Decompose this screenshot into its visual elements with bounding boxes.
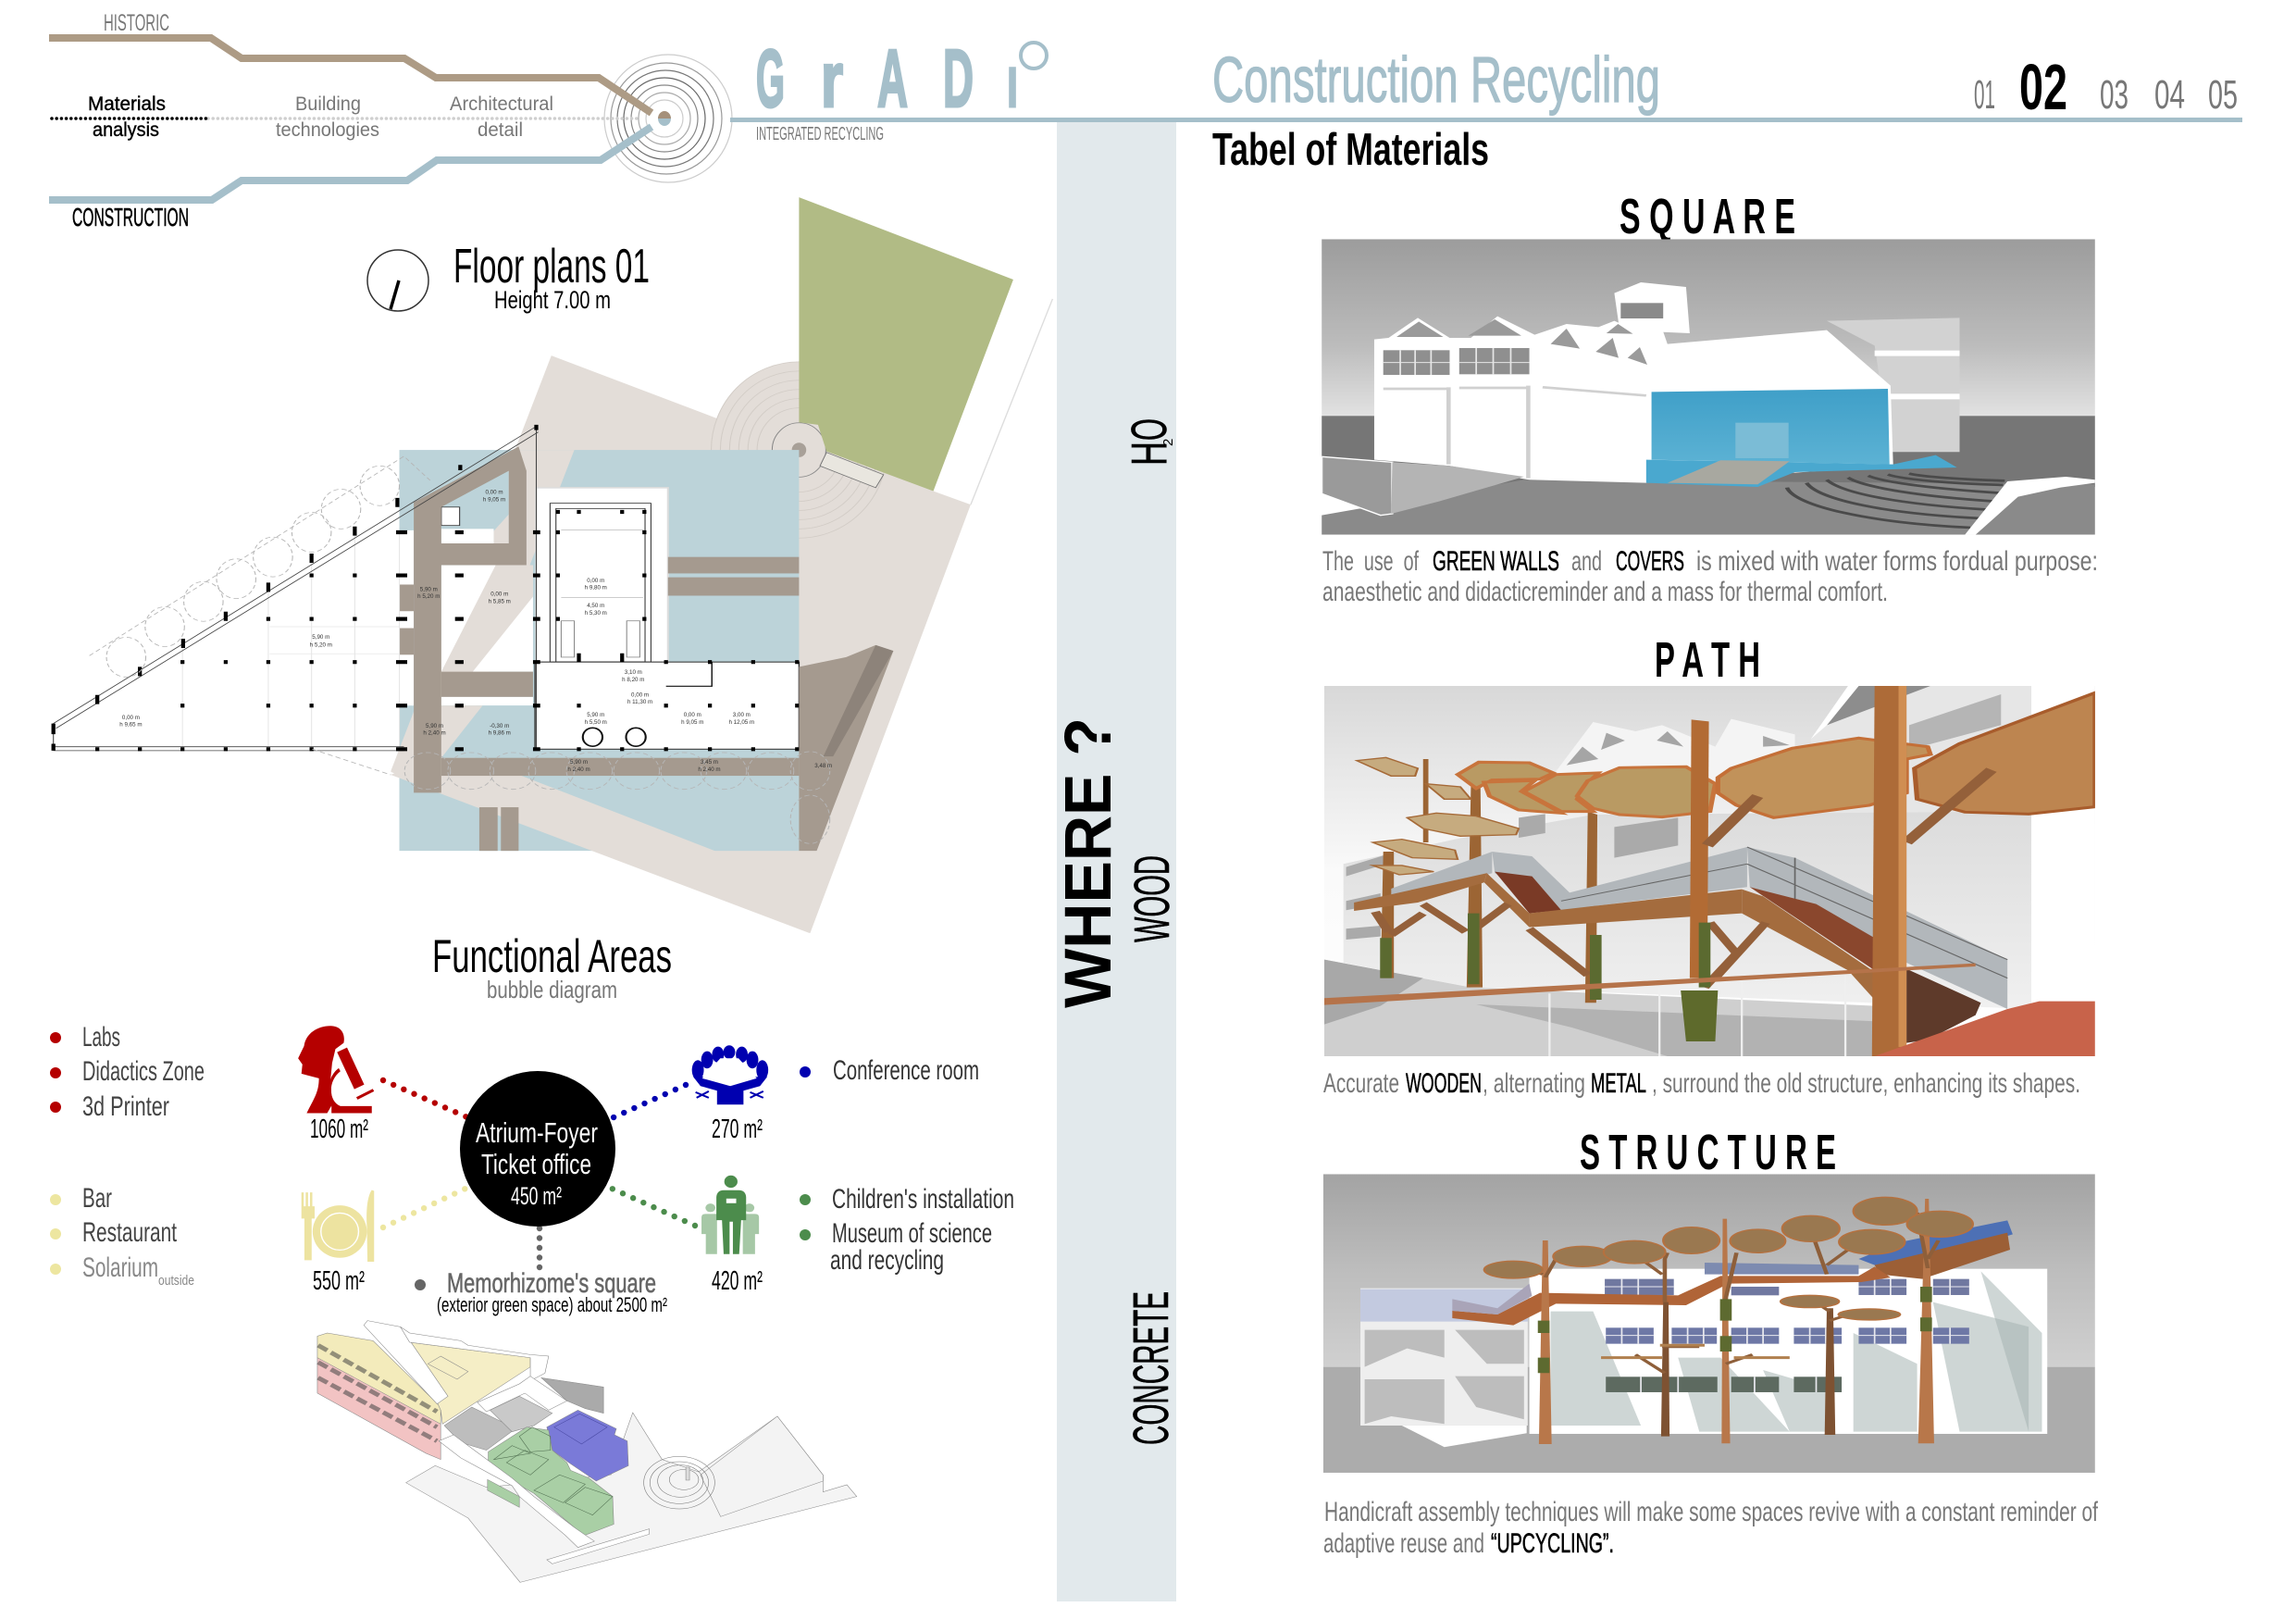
main canopies	[1458, 762, 1715, 817]
logo: GrADi: r	[821, 36, 843, 123]
caption: square	[1322, 546, 2098, 607]
route labels: Materials	[88, 93, 166, 115]
glass annex bands	[1875, 354, 1960, 396]
red deck	[1875, 1002, 2095, 1056]
north arrow	[367, 250, 428, 311]
boardwalk strip	[824, 645, 893, 756]
vine post	[1386, 914, 1705, 1000]
white roof edge	[1811, 686, 1858, 739]
blue inner rim	[554, 1414, 607, 1444]
gable shadows	[1567, 731, 1790, 766]
memorhizome's square label: Memorhizome's square	[447, 1268, 656, 1299]
level labels: h 8,20 m	[622, 677, 644, 683]
level labels: h 2,40 m	[698, 766, 721, 773]
atrium inner frame	[550, 504, 651, 662]
label: wood: WOOD	[1124, 855, 1180, 942]
roof gables	[1556, 719, 1795, 796]
level labels: h 9,05 m	[483, 497, 505, 504]
caption: square: is mixed with water forms fordual purpose:	[1696, 546, 2098, 577]
side strip: where	[1052, 122, 1180, 1601]
caption: square: and	[1571, 546, 1602, 577]
level labels: 0,00 m	[631, 691, 649, 698]
level labels: 0,00 m	[587, 578, 604, 584]
label: concrete: CONCRETE	[1123, 1291, 1179, 1445]
render: square	[1322, 239, 2095, 535]
hall white side	[400, 530, 414, 705]
floor plans heading: Height 7.00 m	[494, 286, 611, 314]
axonometric functional diagram	[317, 1321, 857, 1582]
level labels: h 9,86 m	[489, 730, 511, 737]
hatched block	[541, 1377, 603, 1414]
left stairs	[1391, 462, 1524, 514]
upper bridge deck	[1875, 1233, 2010, 1279]
glass balustrade	[1549, 975, 1845, 1056]
level labels: h 5,85 m	[489, 598, 511, 604]
wall shadows	[1551, 1271, 2042, 1432]
level labels: h 2,40 m	[567, 766, 590, 773]
railing panels	[1391, 847, 2007, 1009]
level labels: 0,00 m	[122, 715, 140, 721]
roof void	[428, 1356, 468, 1379]
caption: path	[1323, 1068, 2080, 1099]
level labels: h 2,40 m	[423, 730, 446, 737]
windows upper	[1605, 1279, 1969, 1295]
area labels: 270 m²	[712, 1115, 763, 1144]
window mullions	[1605, 1279, 1969, 1392]
green museum block	[489, 1427, 614, 1535]
level labels: h 9,80 m	[585, 585, 607, 592]
amphitheatre steps	[1787, 474, 2004, 528]
water basin	[400, 450, 799, 851]
blue conference block	[547, 1410, 628, 1481]
windows lower	[1606, 1377, 1842, 1392]
white building	[1530, 1269, 2047, 1434]
tower window	[1620, 303, 1663, 318]
route line: historic	[49, 38, 652, 113]
route labels: detail	[478, 119, 523, 141]
yellow roof slab	[410, 1342, 530, 1424]
circular stepped plaza	[712, 362, 887, 538]
level labels: h 12,05 m	[728, 719, 754, 726]
caption: path: Accurate	[1323, 1068, 1399, 1099]
legend: conference (blue)	[800, 1055, 979, 1086]
heading: functional areas	[432, 930, 672, 1003]
central bubble: atrium: Ticket office	[481, 1148, 591, 1180]
blue upper bridge	[1858, 1220, 2013, 1265]
dotted progress line	[52, 117, 640, 120]
stair treads front	[1750, 887, 1875, 970]
label: H2O: O	[1122, 418, 1177, 441]
left wing scenes	[1365, 1330, 1524, 1424]
area labels: 1060 m²	[310, 1115, 368, 1144]
legend: food (yellow)	[50, 1183, 194, 1289]
legend: labs (red): 3d Printer	[82, 1091, 169, 1122]
dark roof	[1827, 686, 1930, 725]
brown walkways	[400, 446, 893, 851]
gray atrium	[444, 1407, 515, 1451]
long wall	[1344, 812, 2031, 1009]
giant post	[1872, 686, 1906, 1056]
back posts	[1381, 759, 1597, 1003]
area labels	[310, 1115, 763, 1296]
walkway	[1452, 1266, 1891, 1326]
level labels: h 9,05 m	[681, 719, 703, 726]
page numbers: 04	[2154, 72, 2185, 118]
page numbers	[1974, 51, 2238, 123]
windows mid	[1606, 1327, 1969, 1344]
heading: where?: WHERE ?	[1052, 717, 1125, 1008]
page numbers: 05	[2208, 72, 2238, 118]
atrium circles	[583, 662, 712, 746]
level labels: h 9,65 m	[119, 722, 143, 729]
site slope	[701, 1416, 823, 1516]
gray stairs	[490, 1396, 552, 1432]
structural columns	[97, 510, 797, 751]
low platforms	[1601, 1345, 1790, 1358]
logo: GrADi: ı	[1007, 41, 1018, 122]
plaza stair	[820, 453, 884, 488]
diagonal columns	[54, 425, 536, 751]
caption: path: , surround the old structure, enhancing its shapes.	[1652, 1068, 2080, 1099]
legend: food (yellow): Restaurant	[82, 1217, 177, 1248]
beige strip over water: bottom	[391, 748, 810, 933]
caption: path: METAL	[1591, 1068, 1646, 1099]
sky	[1323, 1174, 2095, 1367]
legend: labs (red)	[50, 1022, 205, 1122]
roof gables	[1396, 319, 1647, 365]
heading: path: P A T H	[1655, 632, 1760, 688]
branches	[1524, 1213, 1939, 1373]
left stair rail	[1452, 1284, 1532, 1314]
legend: museum (green): and recycling	[830, 1245, 944, 1276]
stair treads lower	[1906, 969, 1980, 1043]
caption: square: GREEN WALLS	[1433, 546, 1559, 577]
route labels: HISTORIC	[104, 10, 169, 36]
level labels: 5,90 m	[312, 634, 329, 641]
wing white slab	[535, 662, 799, 749]
legend: food (yellow): outside	[158, 1273, 194, 1289]
floor plans heading	[367, 240, 650, 314]
atrium white slab	[536, 488, 668, 662]
hall grid	[182, 530, 400, 749]
render: structure	[1323, 1174, 2095, 1473]
site base	[406, 1413, 857, 1582]
page numbers: 03	[2100, 72, 2128, 118]
level labels: h 5,20 m	[417, 593, 440, 600]
level labels: 0,00 m	[485, 490, 503, 496]
legend: conference (blue): Conference room	[833, 1055, 979, 1086]
floor shadow near	[1476, 1004, 1875, 1056]
white L walkway	[478, 1377, 567, 1412]
pool	[1646, 455, 1957, 487]
central bubble: atrium: Atrium-Foyer	[476, 1116, 598, 1149]
header rule	[730, 118, 2242, 122]
green lawn	[799, 197, 1013, 492]
ground	[1323, 1367, 2095, 1473]
caption: square: COVERS	[1616, 546, 1684, 577]
concrete bridge	[1668, 460, 1790, 484]
site: thin boundary	[971, 299, 1052, 505]
legend: museum (green)	[800, 1184, 1014, 1276]
level labels: h 5,20 m	[310, 642, 332, 648]
label: H2O: H	[1122, 442, 1177, 466]
white walkway	[439, 1435, 594, 1548]
level labels: 3,45 m	[701, 759, 718, 766]
foreground handrail	[1324, 964, 1976, 1005]
level labels: 3,48 m	[814, 763, 832, 769]
level labels: h 5,50 m	[585, 719, 607, 726]
end ramps	[547, 1529, 650, 1563]
level labels	[119, 490, 832, 773]
area labels: 420 m²	[712, 1266, 763, 1296]
ground	[1322, 480, 2095, 535]
beige strip over water: left	[391, 450, 575, 771]
header: route diagram	[49, 10, 732, 231]
heading: functional areas: Functional Areas	[432, 930, 672, 982]
vine mid	[1681, 990, 1718, 1041]
level labels: 0,00 m	[684, 712, 701, 718]
right white wall	[2031, 686, 2095, 853]
level labels: -0,30 m	[490, 723, 509, 729]
heading: structure: S T R U C T U R E	[1580, 1125, 1836, 1180]
vines	[1544, 1287, 1926, 1373]
caption: structure: adaptive reuse and	[1323, 1528, 1484, 1559]
glass annex	[1827, 318, 1960, 452]
logo: GrADi: D	[943, 32, 974, 124]
logo: GrADi: G	[756, 32, 785, 124]
route labels: Architectural	[450, 93, 553, 115]
deck beam	[1354, 873, 1875, 1000]
floor plans heading: Floor plans 01	[453, 240, 650, 293]
label: H2O: 2	[1160, 439, 1176, 446]
sky	[1322, 239, 2095, 417]
heading: table of materials: Tabel of Materials	[1212, 125, 1489, 175]
wall windows	[1347, 814, 1678, 940]
site: beige plaza	[391, 355, 971, 933]
rail cable lines	[1561, 847, 2007, 978]
sea	[1322, 416, 2095, 487]
legend: museum (green): Museum of science	[832, 1218, 992, 1249]
dark posts	[1661, 1302, 1835, 1437]
windows	[1384, 348, 1530, 375]
level labels: 5,90 m	[426, 723, 443, 729]
floor plan drawing	[54, 197, 1052, 933]
blue top rail	[1705, 1263, 1858, 1275]
level labels: 4,50 m	[587, 603, 604, 609]
legend: food (yellow): Solarium	[82, 1252, 158, 1283]
right brace	[1707, 770, 1992, 845]
left wall	[1322, 456, 1392, 516]
caption: structure: “UPCYCLING”.	[1491, 1528, 1614, 1559]
braces	[1375, 904, 1766, 988]
level labels: h 11,30 m	[627, 699, 652, 705]
route labels: technologies	[276, 119, 379, 141]
legend: labs (red): Labs	[82, 1022, 120, 1053]
window mullions	[1384, 348, 1530, 375]
memorhizome's square label: (exterior green space) about 2500 m²	[437, 1293, 667, 1316]
heading: functional areas: bubble diagram	[487, 976, 617, 1003]
icon: plate and cutlery	[302, 1190, 374, 1262]
white upper path	[401, 1327, 549, 1381]
wide columns	[396, 532, 540, 749]
area labels: 550 m²	[313, 1266, 365, 1296]
floor shadow	[1324, 960, 1423, 1025]
far right canopy	[1915, 692, 2095, 814]
post highlight	[1898, 686, 1906, 1047]
logo: GrADi	[756, 32, 1047, 144]
legend: labs (red): Didactics Zone	[82, 1056, 205, 1087]
level labels: 0,00 m	[490, 591, 508, 598]
level labels: 5,90 m	[570, 759, 588, 766]
route labels: analysis	[93, 119, 159, 141]
icon: conference table	[692, 1045, 768, 1104]
level labels: h 5,30 m	[585, 610, 607, 617]
target post	[686, 1467, 689, 1480]
logo: GrADi: INTEGRATED RECYCLING	[756, 124, 884, 144]
white ramp	[364, 1321, 448, 1404]
level labels: 5,90 m	[420, 586, 438, 592]
white ramp	[1965, 477, 2095, 535]
upper wall	[1811, 686, 2031, 815]
floor	[1324, 960, 1875, 1056]
target plaza	[644, 1456, 714, 1509]
waterfall	[1652, 389, 1890, 465]
interior zones	[441, 471, 533, 758]
caption: structure	[1323, 1497, 2098, 1559]
concentric rings target	[604, 55, 732, 182]
legend: food (yellow): Bar	[82, 1183, 112, 1214]
left wing	[1360, 1289, 1528, 1426]
left floor slab	[1402, 1426, 1527, 1447]
icon: children's group	[701, 1176, 759, 1254]
building	[1374, 317, 1893, 483]
level labels: 5,90 m	[587, 712, 604, 718]
caption: path: WOODEN	[1406, 1068, 1482, 1099]
yellow roof and facade	[317, 1333, 441, 1424]
large canopy	[1718, 738, 1930, 817]
legend: museum (green): Children's installation	[832, 1184, 1014, 1215]
caption: path: , alternating	[1483, 1068, 1585, 1099]
small canopies	[1357, 757, 1519, 875]
caption: square: The use of	[1322, 546, 1419, 577]
level labels: 3,10 m	[625, 669, 642, 676]
green lower block	[488, 1479, 519, 1507]
pilasters	[1384, 386, 1646, 479]
render: path	[1324, 686, 2095, 1056]
route line: construction	[49, 127, 652, 200]
hall outline	[54, 428, 539, 751]
sky	[1324, 686, 2095, 853]
page numbers: 02	[2019, 51, 2067, 123]
heading: square: S Q U A R E	[1620, 189, 1795, 244]
caption: square: anaesthetic and didacticreminder and a mass for thermal comfort.	[1322, 577, 1888, 607]
water doors	[1735, 423, 1789, 458]
route labels: CONSTRUCTION	[72, 203, 189, 231]
tower	[1614, 282, 1690, 333]
page numbers: 01	[1974, 72, 1995, 118]
title: construction recycling: Construction Recycling	[1212, 44, 1660, 116]
facade window bands	[318, 1345, 437, 1441]
central bubble: atrium: 450 m²	[511, 1182, 562, 1210]
bubble connectors	[383, 1080, 695, 1270]
posts	[1539, 1199, 1934, 1444]
icon: labs head and microscope	[298, 1026, 374, 1114]
canopies	[1484, 1197, 1973, 1320]
route labels	[72, 10, 553, 231]
central bubble: atrium	[460, 1071, 615, 1227]
upper window	[1909, 694, 2001, 750]
left wing sky glass	[1360, 1289, 1528, 1322]
dashed trees	[90, 456, 830, 843]
route labels: Building	[295, 93, 361, 115]
level labels: 3,00 m	[733, 712, 751, 718]
logo: GrADi: A	[877, 32, 908, 124]
front post	[1690, 719, 1709, 978]
memorhizome's square label	[415, 1268, 667, 1316]
pink facade	[317, 1358, 441, 1460]
stair treads back	[1495, 872, 1561, 914]
green roof gables	[494, 1427, 613, 1515]
